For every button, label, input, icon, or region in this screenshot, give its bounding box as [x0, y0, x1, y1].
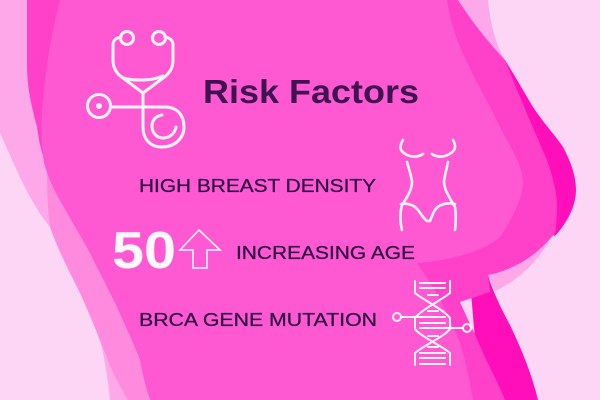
icon: stethoscope: [88, 32, 184, 147]
statistic: 50: 50: [112, 222, 176, 280]
layer: mid pink band: [47, 167, 220, 400]
icon: dna helix: [393, 281, 471, 365]
label: brca gene mutation: BRCA GENE MUTATION: [139, 310, 377, 330]
label: increasing age: INCREASING AGE: [236, 243, 415, 263]
icon: torso: [400, 140, 456, 230]
title: Risk Factors: [203, 73, 419, 110]
layer: deep magenta lower band: [470, 275, 538, 400]
icon: up arrow: [180, 230, 220, 268]
label: high breast density: HIGH BREAST DENSITY: [139, 176, 376, 196]
layer: deep magenta bulge: [500, 60, 576, 236]
